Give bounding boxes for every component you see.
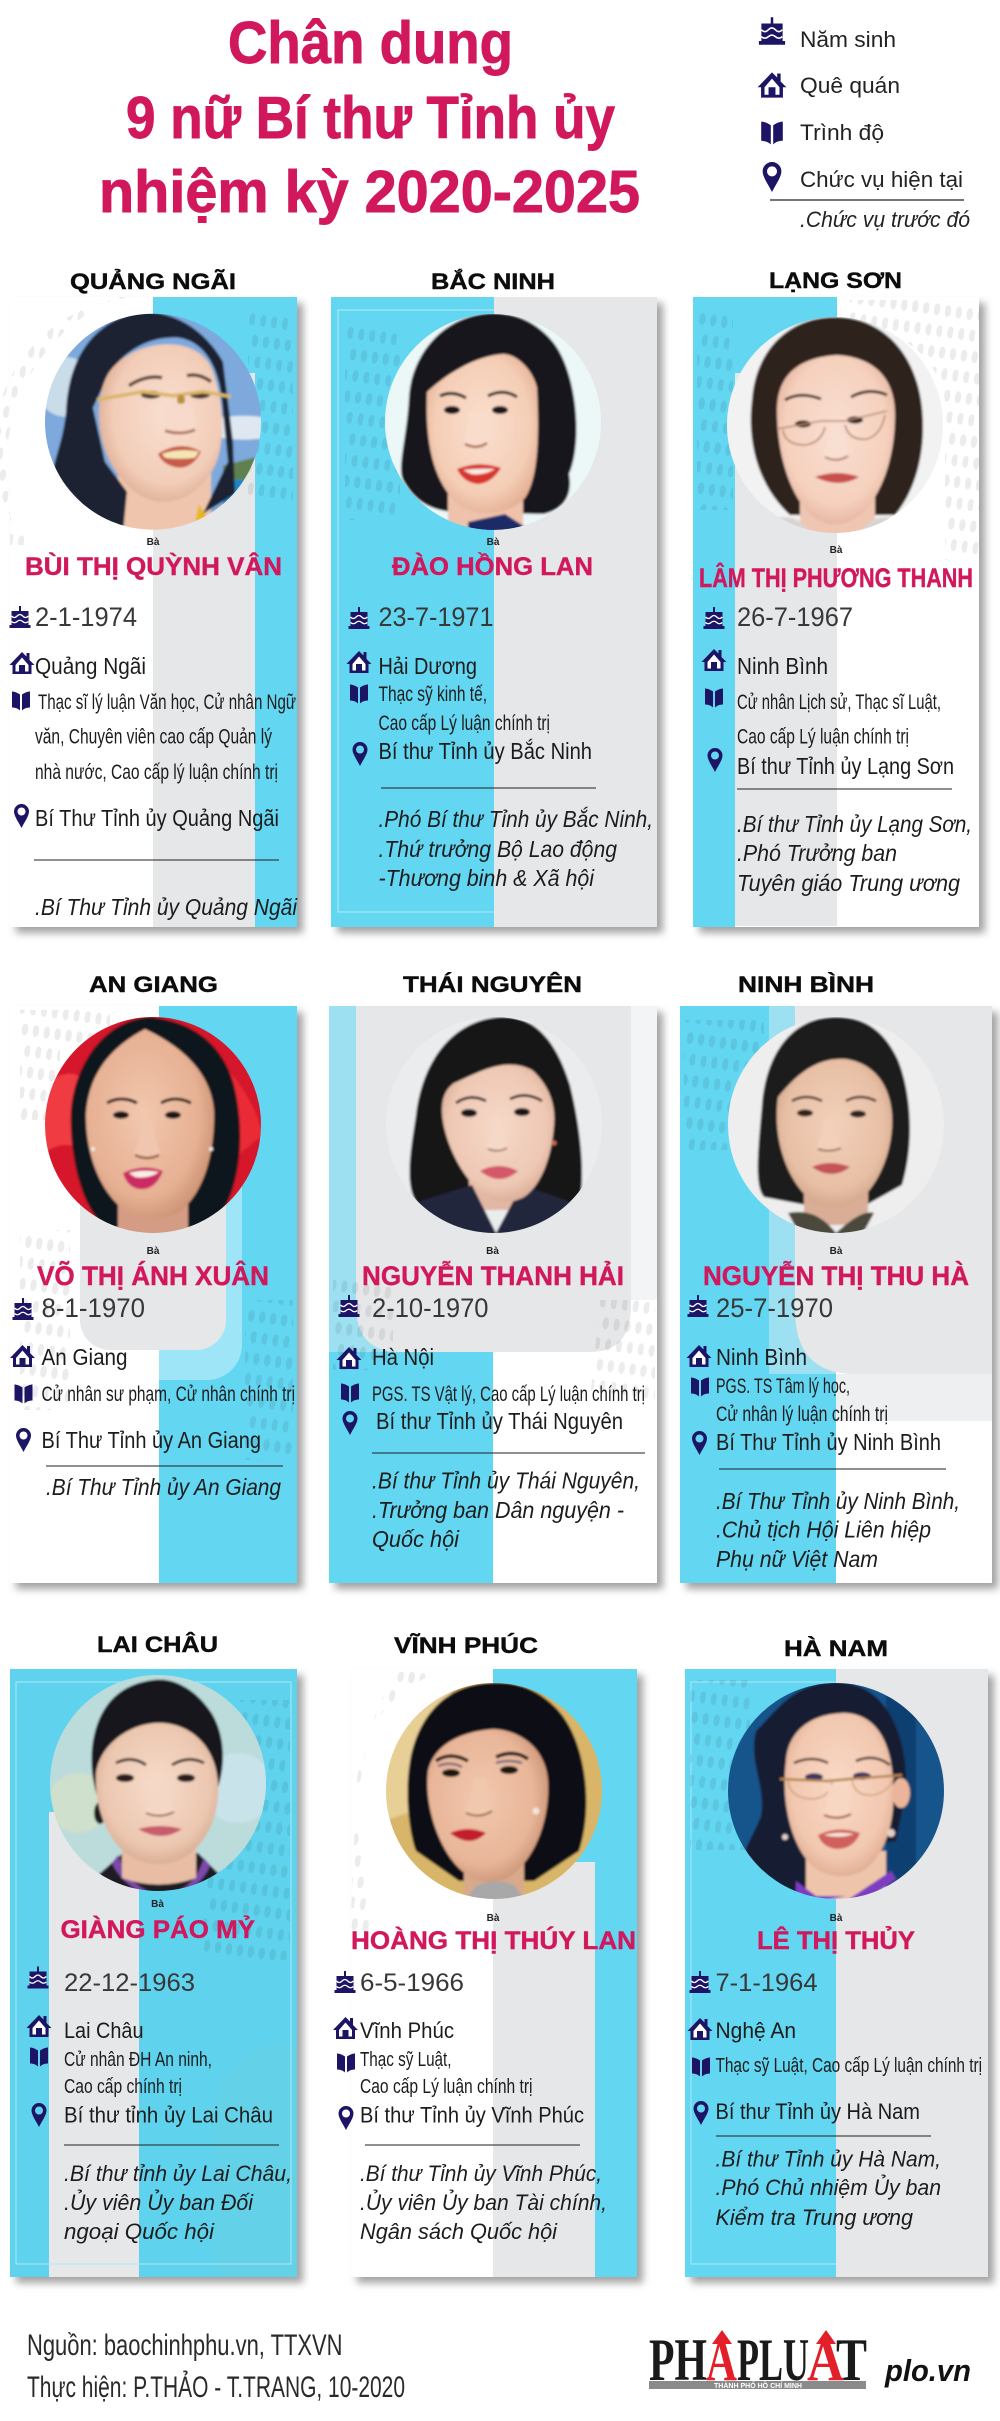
icon: cake <box>12 1298 34 1320</box>
previous positions <box>360 2161 607 2244</box>
icon: house <box>10 652 34 674</box>
honorific: Bà <box>487 537 500 548</box>
previous positions: .Thứ trưởng Bộ Lao động <box>378 836 617 862</box>
birth date row: 26-7-1967 <box>737 602 853 632</box>
icon: location pin <box>352 742 368 766</box>
current position row: Bí Thư Tỉnh ủy Quảng Ngãi <box>35 805 279 831</box>
education row: Cử nhân lý luận chính trị <box>716 1403 888 1426</box>
previous positions: .Ủy viên Ủy ban Tài chính, <box>360 2189 607 2215</box>
education row: PGS. TS Tâm lý học, <box>716 1375 850 1398</box>
honorific: Bà <box>830 545 843 556</box>
card background <box>10 1006 297 1583</box>
province heading: LẠNG SƠN <box>769 268 902 293</box>
card background <box>693 297 979 927</box>
previous positions: .Bí Thư Tỉnh ủy An Giang <box>46 1474 281 1500</box>
panel: Vĩnh Phúc <box>333 1633 637 2277</box>
previous positions: .Ủy viên Ủy ban Đối <box>64 2189 254 2215</box>
education row: nhà nước, Cao cấp lý luận chính trị <box>35 761 278 784</box>
education row: PGS. TS Vật lý, Cao cấp Lý luận chính trị <box>372 1383 645 1406</box>
education row: Cử nhân sư phạm, Cử nhân chính trị <box>42 1383 295 1406</box>
title <box>99 10 640 225</box>
panel: Hà Nam <box>685 1636 988 2277</box>
logo: Pháp Luật: A <box>807 2327 844 2393</box>
legend: Chức vụ hiện tại <box>800 167 963 192</box>
icon: book <box>14 1384 32 1404</box>
education row: Cử nhân ĐH An ninh, <box>64 2049 212 2071</box>
previous positions: .Bí thư Tỉnh ủy Hà Nam, <box>716 2146 941 2172</box>
education row <box>691 1375 888 1426</box>
birth date row: 6-5-1966 <box>360 1969 464 1997</box>
icon: house <box>10 1345 35 1367</box>
education row: Cao cấp chính trị <box>64 2076 182 2098</box>
province heading: VĨNH PHÚC <box>394 1633 538 1658</box>
education row: Thạc sĩ lý luận Văn học, Cử nhân Ngữ <box>38 691 296 714</box>
previous positions: Ngân sách Quốc hội <box>360 2219 558 2244</box>
name: NGUYỄN THỊ THU HÀ <box>703 1260 969 1291</box>
icon: house <box>333 2017 358 2039</box>
icon: house <box>336 1347 362 1369</box>
icon: location pin <box>338 2106 354 2130</box>
name: NGUYỄN THANH HẢI <box>362 1259 624 1291</box>
name: GIÀNG PÁO MỶ <box>60 1914 255 1944</box>
icon: cake <box>759 17 785 45</box>
previous positions <box>372 1468 640 1552</box>
portrait photo <box>384 1681 604 1901</box>
education row: văn, Chuyên viên cao cấp Quản lý <box>35 726 272 748</box>
icon: book <box>761 122 783 144</box>
legend: Trình độ <box>800 120 884 145</box>
province heading: HÀ NAM <box>784 1636 888 1661</box>
card background <box>10 1669 297 2277</box>
honorific: Bà <box>151 1899 164 1910</box>
portrait photo <box>45 314 261 530</box>
education row <box>341 1383 645 1406</box>
education row <box>337 2049 532 2098</box>
previous positions: Kiểm tra Trung ương <box>716 2205 914 2230</box>
title: 9 nữ Bí thư Tỉnh ủy <box>126 85 615 151</box>
icon: house <box>686 1345 712 1367</box>
panel: Thái Nguyên <box>329 972 657 1583</box>
panel: Ninh Bình <box>680 972 992 1583</box>
birth date row: 2-1-1974 <box>35 602 137 632</box>
previous positions: .Bí thư Tỉnh ủy Lạng Sơn, <box>737 811 972 837</box>
icon: book <box>705 688 723 708</box>
education row <box>705 688 941 748</box>
education row: Thạc sỹ kinh tế, <box>378 683 487 706</box>
panel: Quảng Ngãi <box>0 269 298 927</box>
card background <box>680 1006 992 1583</box>
legend: .Chức vụ trước đó <box>800 207 970 232</box>
previous positions: .Bí thư Tỉnh ủy Vĩnh Phúc, <box>360 2161 602 2186</box>
province heading: LAI CHÂU <box>97 1632 218 1657</box>
current position row: Bí thư Tỉnh ủy Vĩnh Phúc <box>360 2102 584 2128</box>
portrait photo <box>408 1017 584 1233</box>
name: BÙI THỊ QUỲNH VÂN <box>25 551 282 581</box>
icon: book <box>692 2058 710 2076</box>
icon: cake <box>690 1971 710 1993</box>
card background <box>329 1006 657 1583</box>
province heading: NINH BÌNH <box>738 972 874 997</box>
icon: location pin <box>16 1428 31 1452</box>
birth date row: 23-7-1971 <box>378 602 494 632</box>
previous positions: .Phó Trưởng ban <box>737 840 897 866</box>
icon: location pin <box>763 162 781 192</box>
source credits <box>27 2329 405 2404</box>
education row <box>12 691 296 784</box>
card background <box>0 297 297 927</box>
panel: Lai Châu <box>10 1632 297 2277</box>
logo: Pháp Luật: A <box>706 2327 737 2393</box>
education row <box>350 683 550 735</box>
icon: house <box>346 651 372 673</box>
portrait photo <box>728 1017 911 1233</box>
hometown row <box>336 1344 434 1370</box>
education row: Cao cấp Lý luận chính trị <box>360 2076 532 2098</box>
panel: Lạng Sơn <box>693 268 979 927</box>
birth date row: 2-10-1970 <box>372 1293 488 1323</box>
honorific: Bà <box>486 1246 499 1257</box>
previous positions: .Bí thư tỉnh ủy Lai Châu, <box>64 2161 292 2186</box>
icon: location pin <box>14 804 29 828</box>
panel: Bắc Ninh <box>331 269 657 927</box>
hometown row <box>10 1344 128 1370</box>
icon: book <box>12 692 30 710</box>
previous positions: .Bí Thư Tỉnh ủy Quảng Ngãi <box>35 894 298 920</box>
previous positions: .Chủ tịch Hội Liên hiệp <box>716 1516 931 1542</box>
previous positions <box>64 2161 292 2244</box>
icon: location pin <box>692 1431 707 1455</box>
logo: Pháp Luật: PLU <box>737 2327 809 2393</box>
icon: book <box>691 1378 709 1396</box>
previous positions <box>716 2146 941 2230</box>
previous positions <box>378 806 653 891</box>
icon: cake <box>348 607 370 629</box>
portrait photo <box>725 315 945 535</box>
hometown row: Hà Nội <box>372 1344 434 1370</box>
education row: Cao cấp Lý luận chính trị <box>378 712 550 735</box>
icon: location pin <box>32 2103 46 2127</box>
website label: plo.vn <box>884 2353 971 2388</box>
hometown row: An Giang <box>42 1344 128 1370</box>
icon: location pin <box>342 1411 358 1435</box>
previous positions: .Bí Thư Tỉnh ủy Ninh Bình, <box>716 1488 960 1514</box>
portrait photo <box>726 1681 946 1903</box>
current position row: Bí thư Tỉnh ủy Thái Nguyên <box>376 1408 623 1434</box>
icon: house <box>688 2018 712 2040</box>
icon: cake <box>338 1295 360 1317</box>
icon: book <box>341 1384 359 1402</box>
name: ĐÀO HỒNG LAN <box>392 551 593 581</box>
previous positions: Quốc hội <box>372 1526 460 1552</box>
current position row: Bí thư Tỉnh ủy Hà Nam <box>716 2099 920 2124</box>
hometown row: Hải Dương <box>378 653 477 679</box>
source credits: Thực hiện: P.THẢO - T.TRANG, 10-2020 <box>27 2370 405 2404</box>
card background <box>331 297 657 927</box>
education row <box>30 2048 212 2098</box>
honorific: Bà <box>147 1246 160 1257</box>
hometown row: Ninh Bình <box>737 653 828 679</box>
portrait photo <box>43 1015 263 1235</box>
hometown row <box>702 649 828 679</box>
icon: house <box>758 72 786 98</box>
previous positions: Phụ nữ Việt Nam <box>716 1546 878 1572</box>
icon: cake <box>688 1295 708 1317</box>
card background <box>351 1669 637 2277</box>
icon: cake <box>28 1966 48 1988</box>
hometown row <box>686 1344 807 1370</box>
portrait photo <box>383 312 603 532</box>
previous positions: -Thương binh & Xã hội <box>378 865 595 891</box>
honorific: Bà <box>830 1246 843 1257</box>
icon: book <box>350 684 368 704</box>
logo: Pháp Luật: T <box>836 2327 867 2393</box>
hometown row: Vĩnh Phúc <box>360 2018 454 2043</box>
current position row: Bí Thư Tỉnh ủy Ninh Bình <box>716 1429 941 1455</box>
legend: Quê quán <box>800 73 900 98</box>
hometown row: Lai Châu <box>64 2018 144 2043</box>
honorific: Bà <box>487 1913 500 1924</box>
icon: house <box>702 649 726 671</box>
province heading: BẮC NINH <box>431 269 555 294</box>
icon: location pin <box>694 2101 708 2125</box>
hometown row: Ninh Bình <box>716 1344 807 1370</box>
previous positions: ngoại Quốc hội <box>64 2219 215 2244</box>
card background <box>685 1669 988 2277</box>
source credits: Nguồn: baochinhphu.vn, TTXVN <box>27 2329 342 2362</box>
title: nhiệm kỳ 2020-2025 <box>99 159 640 225</box>
panel: An Giang <box>10 972 297 1583</box>
previous positions <box>716 1488 960 1572</box>
hometown row <box>26 2015 144 2043</box>
logo: Pháp Luật: THÀNH PHỐ HỒ CHÍ MINH <box>714 2380 802 2390</box>
name: VÕ THỊ ÁNH XUÂN <box>37 1260 269 1291</box>
education row: Cao cấp Lý luận chính trị <box>737 726 909 748</box>
birth date row: 8-1-1970 <box>42 1293 145 1323</box>
legend: Năm sinh <box>800 27 896 52</box>
hometown row: Nghệ An <box>716 2018 796 2043</box>
current position row: Bí thư tỉnh ủy Lai Châu <box>64 2102 273 2128</box>
birth date row: 7-1-1964 <box>716 1969 818 1997</box>
icon: location pin <box>708 748 722 772</box>
previous positions <box>737 811 972 896</box>
previous positions: .Bí thư Tỉnh ủy Thái Nguyên, <box>372 1468 640 1494</box>
icon: cake <box>10 606 30 628</box>
name: LÊ THỊ THỦY <box>757 1925 915 1955</box>
previous positions: .Trưởng ban Dân nguyện - <box>372 1497 624 1523</box>
previous positions: .Phó Bí thư Tỉnh ủy Bắc Ninh, <box>378 806 653 832</box>
education row: Thạc sỹ Luật, <box>360 2049 452 2071</box>
province heading: QUẢNG NGÃI <box>70 269 236 294</box>
education row <box>14 1383 295 1406</box>
current position row: Bí thư Tỉnh ủy Bắc Ninh <box>378 738 592 764</box>
icon: cake <box>704 607 724 629</box>
logo: Pháp Luật <box>649 2327 867 2393</box>
birth date row: 22-12-1963 <box>64 1969 195 1997</box>
province heading: THÁI NGUYÊN <box>403 972 582 997</box>
honorific: Bà <box>830 1913 843 1924</box>
current position row: Bí Thư Tỉnh ủy An Giang <box>42 1427 261 1453</box>
legend <box>758 17 970 232</box>
icon: house <box>26 2015 52 2037</box>
previous positions: Tuyên giáo Trung ương <box>737 870 960 896</box>
previous positions: .Phó Chủ nhiệm Ủy ban <box>716 2174 941 2200</box>
name: HOÀNG THỊ THÚY LAN <box>351 1925 636 1955</box>
icon: book <box>30 2048 48 2066</box>
icon: cake <box>334 1971 356 1993</box>
current position row: Bí thư Tỉnh ủy Lạng Sơn <box>737 753 954 779</box>
birth date row: 25-7-1970 <box>716 1293 833 1323</box>
portrait photo <box>48 1673 273 1893</box>
logo: Pháp Luật: PH <box>649 2327 707 2393</box>
hometown row: Quảng Ngãi <box>35 653 146 679</box>
icon: book <box>337 2054 355 2072</box>
title: Chân dung <box>228 10 513 76</box>
province heading: AN GIANG <box>89 972 218 997</box>
hometown row <box>346 651 477 679</box>
honorific: Bà <box>147 537 160 548</box>
current position row <box>708 748 954 779</box>
